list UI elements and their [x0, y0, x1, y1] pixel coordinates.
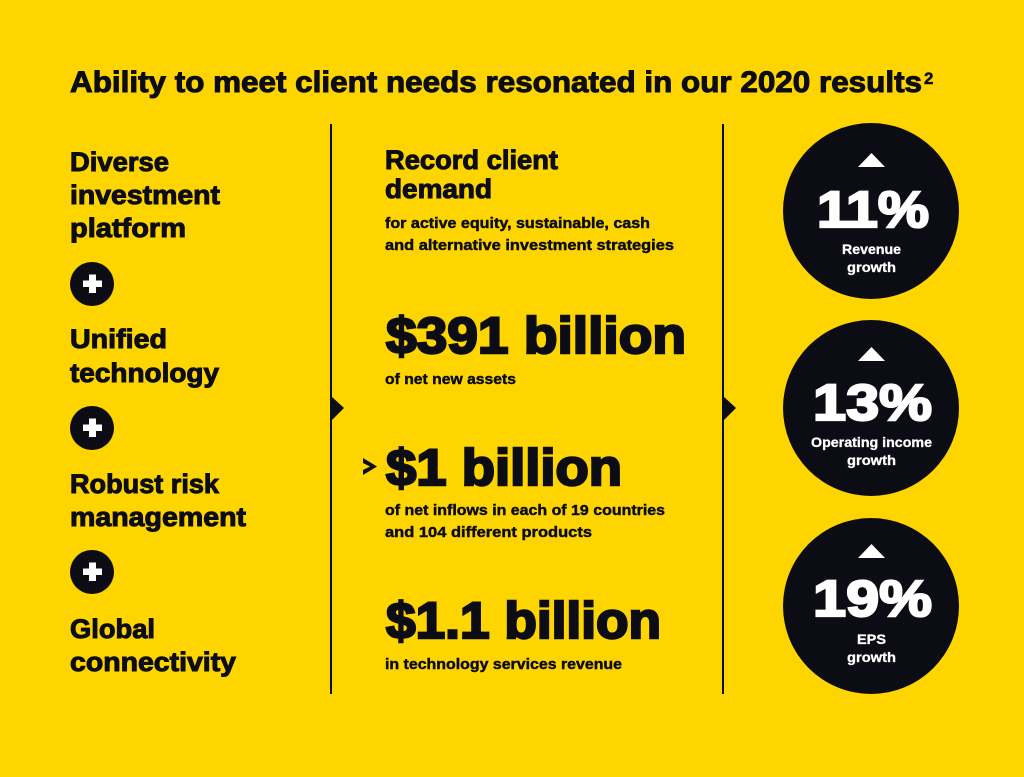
arrow: divider 2	[722, 124, 736, 694]
stat: 391 billion: of net new assets	[385, 372, 516, 388]
circle: EPS growth: EPS	[857, 632, 886, 647]
stat: 1.1 billion: in technology services revenue	[385, 657, 622, 673]
circle: revenue growth: growth	[847, 260, 896, 275]
text: robust risk management: management	[70, 502, 246, 532]
text: diverse investment platform: investment	[70, 180, 220, 210]
text: global connectivity	[70, 614, 236, 677]
text: demand description: for active equity, sustainable, cash	[385, 216, 650, 232]
panel: middle column results	[363, 145, 686, 673]
icon: chevron	[363, 458, 377, 475]
circle: operating income growth: growth	[847, 453, 896, 468]
stat: 391 billion: $391 billion	[386, 307, 686, 364]
text: demand description	[385, 216, 674, 254]
circle: EPS growth: 19%	[813, 570, 932, 627]
icon: plus 1	[70, 262, 114, 306]
text: global connectivity: connectivity	[70, 647, 236, 677]
text: global connectivity: Global	[70, 614, 155, 644]
icon: plus 2	[70, 406, 114, 450]
text: robust risk management: Robust risk	[70, 469, 219, 499]
circle: EPS growth: growth	[847, 650, 896, 665]
text: diverse investment platform: platform	[70, 213, 186, 243]
text: demand description: and alternative investment strategies	[385, 238, 674, 254]
circle: operating income growth: 13%	[813, 374, 932, 431]
stat: 1 billion: of net inflows in each of 19 countries	[385, 503, 665, 519]
text: robust risk management	[70, 469, 246, 532]
stat: 391 billion	[385, 307, 686, 388]
title: 2	[924, 69, 933, 88]
arrow: divider 1	[330, 124, 344, 694]
stat: 1 billion: and 104 different products	[385, 525, 592, 541]
stat: 1.1 billion: $1.1 billion	[386, 592, 661, 649]
panel: left column strengths	[70, 147, 246, 677]
heading: record client demand	[385, 145, 558, 204]
text: diverse investment platform: Diverse	[70, 147, 169, 177]
circle: revenue growth	[783, 123, 959, 299]
text: unified technology: Unified	[70, 324, 167, 354]
heading: record client demand: Record client	[385, 145, 558, 175]
circle: revenue growth: Revenue	[842, 242, 902, 257]
text: unified technology	[70, 324, 219, 388]
circle: revenue growth: 11%	[817, 181, 929, 238]
panel: growth circles	[783, 123, 959, 694]
stat: 1 billion	[385, 439, 665, 541]
icon: plus 3	[70, 550, 114, 594]
title: Ability to meet client needs resonated in our 2020 results	[70, 66, 922, 99]
stat: 1.1 billion	[385, 592, 661, 673]
circle: operating income growth	[783, 320, 959, 496]
heading: record client demand: demand	[385, 174, 492, 204]
circle: EPS growth	[783, 518, 959, 694]
text: diverse investment platform	[70, 147, 220, 243]
circle: operating income growth: Operating income	[811, 435, 933, 450]
stat: 1 billion: $1 billion	[386, 439, 622, 496]
text: unified technology: technology	[70, 358, 219, 388]
